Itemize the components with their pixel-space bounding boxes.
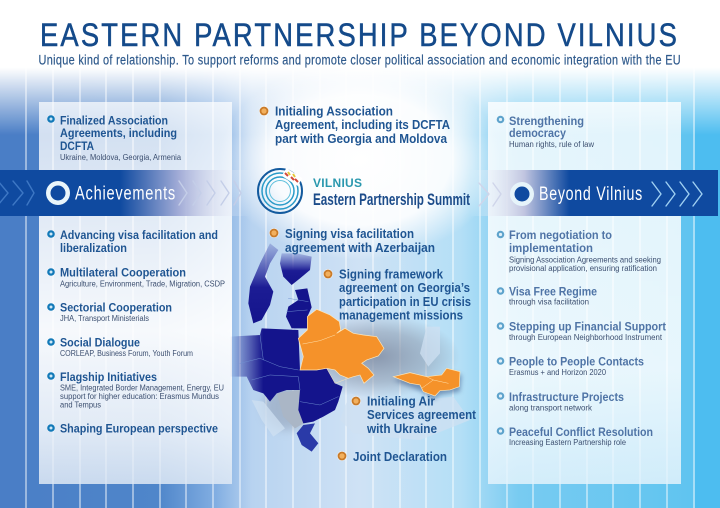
item: air services agreement: with Ukraine bbox=[366, 422, 437, 436]
item: people to people contacts bbox=[497, 354, 644, 377]
item: strengthening democracy: democracy bbox=[509, 126, 566, 140]
item: social dialogue bbox=[47, 336, 193, 358]
item: air services agreement: Initialing Air bbox=[367, 394, 435, 408]
beyond vilnius label: Beyond Vilnius bbox=[539, 184, 643, 205]
chevrons left bbox=[0, 181, 34, 205]
chevrons bbox=[652, 182, 702, 206]
central and eastern EU members bbox=[230, 328, 343, 423]
map shadow bbox=[293, 315, 460, 398]
item: infrastructure projects: along transport network bbox=[509, 404, 593, 412]
item: visa agreement with azerbaijan: agreement with Azerbaijan bbox=[285, 241, 435, 255]
partner borders bbox=[303, 335, 448, 388]
item: peaceful conflict resolution: Peaceful Conflict Resolution bbox=[509, 425, 653, 439]
item: infrastructure projects bbox=[497, 390, 624, 412]
item: sectorial cooperation: Sectorial Cooperation bbox=[60, 300, 172, 314]
item: air services agreement bbox=[351, 394, 477, 436]
item: georgia framework agreement: agreement on Georgia’s bbox=[339, 281, 470, 295]
partner countries in orange bbox=[298, 309, 384, 383]
item: visa free regime: through visa facilitation bbox=[509, 298, 589, 306]
item: georgia framework agreement: management missions bbox=[339, 308, 463, 322]
summit wordmark: Eastern Partnership Summit bbox=[313, 191, 470, 209]
chevrons fading bbox=[479, 183, 501, 206]
vilnius summit logo bbox=[258, 169, 470, 213]
item: visa agreement with azerbaijan bbox=[269, 227, 435, 255]
vilnius wordmark: VILNIUS bbox=[313, 176, 362, 190]
icon: concentric swirl bbox=[258, 169, 302, 213]
achievements label: Achievements bbox=[75, 184, 176, 204]
item: sectorial cooperation: JHA, Transport Ministerials bbox=[60, 314, 149, 323]
item: social dialogue: CORLEAP, Business Forum, Youth Forum bbox=[60, 349, 193, 358]
item: sectorial cooperation bbox=[47, 300, 172, 323]
item: visa free regime bbox=[497, 284, 597, 306]
item: strengthening democracy bbox=[497, 114, 594, 149]
item: georgia framework agreement bbox=[323, 268, 471, 322]
panel: beyond vilnius background bbox=[488, 102, 681, 484]
item: strengthening democracy: Strengthening bbox=[509, 114, 584, 128]
item: peaceful conflict resolution bbox=[497, 425, 653, 447]
member state borders bbox=[240, 298, 338, 405]
item: visa facilitation bbox=[47, 228, 218, 255]
item: finalized association agreements bbox=[47, 114, 182, 162]
item: financial support: Stepping up Financial Support bbox=[509, 320, 666, 334]
band: achievements bbox=[0, 170, 250, 216]
item: initialing association agreement: Initialing Association bbox=[275, 104, 393, 118]
item: finalized association agreements: Agreements, including bbox=[60, 126, 177, 140]
item: flagship initiatives: and Tempus bbox=[60, 400, 101, 410]
item: from negotiation to implementation: From negotiation to bbox=[509, 228, 612, 242]
item: from negotiation to implementation bbox=[497, 228, 661, 273]
item: financial support bbox=[497, 320, 666, 342]
Greece bbox=[297, 423, 318, 452]
item: flagship initiatives: SME, Integrated Border Management, Energy, EU bbox=[60, 384, 224, 392]
list: summit outcomes bbox=[259, 104, 477, 464]
item: multilateral cooperation: Multilateral Cooperation bbox=[60, 266, 186, 280]
item: people to people contacts: Erasmus + and Horizon 2020 bbox=[509, 368, 607, 377]
item: georgia framework agreement: participation in EU crisis bbox=[339, 295, 471, 309]
item: from negotiation to implementation: Signing Association Agreements and seeking bbox=[509, 256, 661, 264]
item: social dialogue: Social Dialogue bbox=[60, 336, 140, 350]
item: multilateral cooperation bbox=[47, 266, 225, 288]
item: finalized association agreements: DCFTA bbox=[60, 139, 94, 153]
item: finalized association agreements: Ukraine, Moldova, Georgia, Armenia bbox=[60, 153, 182, 162]
item: multilateral cooperation: Agriculture, Environment, Trade, Migration, CSDP bbox=[60, 280, 225, 288]
icon: achievements ring bbox=[46, 181, 70, 205]
item: visa free regime: Visa Free Regime bbox=[509, 284, 597, 298]
item: infrastructure projects: Infrastructure Projects bbox=[509, 390, 624, 404]
item: flagship initiatives: support for higher education: Erasmus Mundus bbox=[60, 392, 219, 401]
band: beyond vilnius bbox=[470, 170, 718, 216]
item: initialing association agreement: part with Georgia and Moldova bbox=[275, 132, 448, 146]
item: air services agreement: Services agreement bbox=[367, 408, 477, 422]
item: flagship initiatives bbox=[47, 370, 224, 410]
item: from negotiation to implementation: provisional application, ensuring ratification bbox=[509, 264, 657, 273]
item: peaceful conflict resolution: Increasing Eastern Partnership role bbox=[509, 438, 627, 447]
item: joint declaration: Joint Declaration bbox=[353, 450, 447, 464]
Caucasus shadow bbox=[393, 372, 462, 400]
list: achievements bbox=[47, 114, 225, 436]
Balkans in grey bbox=[277, 390, 303, 428]
icon: beyond vilnius ring bbox=[510, 182, 534, 206]
item: people to people contacts: People to People Contacts bbox=[509, 354, 644, 368]
light land bbox=[252, 327, 470, 440]
item: finalized association agreements: Finalized Association bbox=[60, 114, 168, 128]
chevrons fading bbox=[179, 181, 241, 205]
panel: achievements background bbox=[39, 102, 232, 484]
item: flagship initiatives: Flagship Initiatives bbox=[60, 370, 157, 384]
Baltics bbox=[286, 288, 312, 328]
map of Eastern Europe bbox=[230, 243, 470, 452]
item: visa facilitation: Advancing visa facilitation and bbox=[60, 228, 218, 242]
item: initialing association agreement: Agreement, including its DCFTA bbox=[275, 118, 450, 132]
item: financial support: through European Neighborhood Instrument bbox=[509, 333, 663, 342]
item: visa facilitation: liberalization bbox=[60, 241, 127, 255]
item: georgia framework agreement: Signing framework bbox=[339, 268, 443, 282]
Finland bbox=[280, 253, 312, 285]
Scandinavia bbox=[248, 243, 278, 323]
item: initialing association agreement bbox=[259, 104, 450, 146]
item: visa agreement with azerbaijan: Signing visa facilitation bbox=[285, 227, 414, 241]
item: strengthening democracy: Human rights, rule of law bbox=[509, 140, 594, 149]
list: beyond vilnius bbox=[497, 114, 666, 447]
item: shaping european perspective: Shaping European perspective bbox=[60, 422, 218, 436]
item: from negotiation to implementation: implementation bbox=[509, 241, 593, 255]
